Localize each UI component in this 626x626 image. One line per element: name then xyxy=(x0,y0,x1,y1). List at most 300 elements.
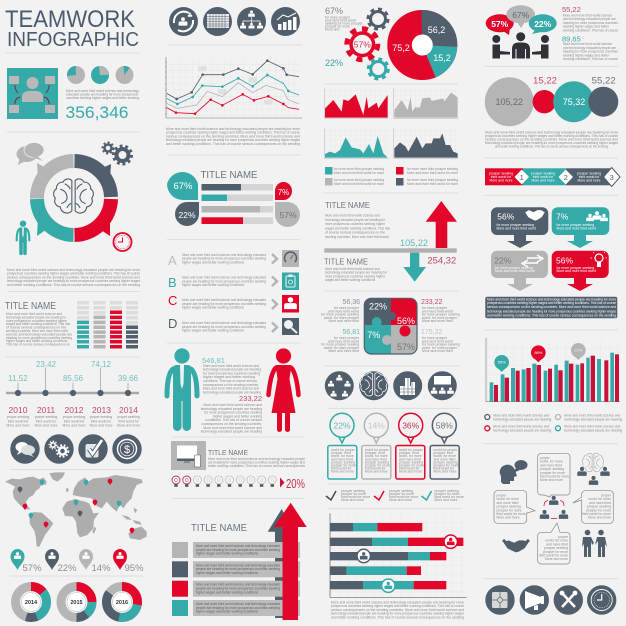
stat: 56,81: 56,81 xyxy=(342,329,360,336)
timeline: 39,66 xyxy=(118,374,139,383)
stat: 89,65: seeking higher wages and better xyxy=(563,53,610,57)
stat: 55,22: and technology educated people are xyxy=(563,17,616,21)
timeline: More and more xyxy=(6,424,30,428)
card text: third world for xyxy=(434,467,455,471)
callout: left: third world for more xyxy=(496,512,526,516)
list: D: More and more third world science and technology educated xyxy=(182,321,266,325)
callout: left: and more third xyxy=(496,501,518,505)
box: 22% exchange xyxy=(491,251,548,291)
arrow: red xyxy=(274,503,307,620)
text block xyxy=(7,268,140,287)
checklist: prosper seeking xyxy=(389,489,413,493)
text banners xyxy=(193,542,300,616)
list: D: D xyxy=(168,316,177,331)
callout: right: prosper seeking xyxy=(587,505,611,509)
timeline xyxy=(6,360,140,428)
stat: 67%: and more third world xyxy=(325,18,356,22)
stat: 56,81: More and more third xyxy=(328,349,359,353)
text banners: people are heading for more prosperous countries seeking xyxy=(196,548,280,552)
ribbon steps 1-3 xyxy=(485,168,620,186)
bubble chart: 15,22 xyxy=(533,75,557,85)
legend: column chart: More and more third world science and xyxy=(564,413,620,417)
colour swatches xyxy=(172,542,188,616)
gear: dark xyxy=(368,9,388,29)
icon: brain with three people xyxy=(577,453,610,485)
stat: 546,81: 546,81 xyxy=(202,356,225,365)
icon: three people xyxy=(492,32,549,58)
text banners: higher wages and better working conditions xyxy=(196,571,258,575)
checklist: More and more xyxy=(389,498,412,502)
timeline: 23,42 xyxy=(36,360,57,369)
stat: 233,22: technology educated people are heading xyxy=(201,430,262,434)
text block: countries seeking higher wages and better working xyxy=(66,96,139,100)
panel: team communication xyxy=(494,453,613,564)
icon: gears xyxy=(102,142,132,164)
panel: gears and pie xyxy=(325,6,451,79)
callout: right xyxy=(573,491,613,523)
bubble 67%: 67% xyxy=(173,181,193,192)
bubble chart: 105,22 xyxy=(496,97,523,107)
list: C: higher wages and better working conditions xyxy=(182,306,244,310)
card text: prosper seeking xyxy=(434,460,458,464)
card text: More and more xyxy=(399,470,422,474)
timeline: third world for xyxy=(118,420,140,424)
checklist: prosper for more xyxy=(434,492,460,496)
text block: More and more third world science and xyxy=(325,214,380,218)
text block: More and more third world science and xyxy=(6,312,62,316)
ribbon steps 1-3: prosper seeking xyxy=(489,172,513,176)
text block: More and more third world science and technology educated people are heading for more xyxy=(331,600,464,604)
legend: column chart: More and more third world science and xyxy=(493,413,549,417)
stat: 233,22: world. for more prosper xyxy=(422,316,458,320)
title: TEAMWORK xyxy=(5,6,135,33)
text block: science and technology educated people are xyxy=(6,332,72,336)
timeline: 2011 xyxy=(37,405,55,415)
pie chart: 56,2 xyxy=(428,25,445,35)
text block: and better working conditions. This has of course serious consequences on the sending xyxy=(331,615,464,619)
text banners: higher wages and better working conditions xyxy=(196,610,258,614)
checklist: third world for more xyxy=(341,495,370,499)
text banners: More and more third world science and technology educated xyxy=(196,544,280,548)
ribbon steps 1-3: More and more xyxy=(578,178,601,182)
box: 7% team xyxy=(552,207,609,248)
stat: 175,22: for more prosper xyxy=(422,336,448,340)
timeline: third world for xyxy=(91,420,112,424)
timeline: third world for xyxy=(8,420,29,424)
area charts xyxy=(324,88,458,158)
stat: 56,36: 56,36 xyxy=(342,299,360,306)
stat: 233,22: More and more third world science and xyxy=(203,426,262,430)
text block: higher wages and better working conditions. xyxy=(6,339,68,343)
timeline: 11,52 xyxy=(8,374,28,383)
heading: TITLE NAME xyxy=(191,522,247,534)
stat: 546,81 xyxy=(202,356,261,394)
checklist: prosper seeking xyxy=(434,489,459,493)
box: 22% exchange: More and more third world xyxy=(495,269,535,273)
dark text box: prosperous countries seeking higher wages and better working conditions. This has of course xyxy=(487,301,616,305)
callout: top: proper xyxy=(540,456,551,460)
list: A: More and more third world science and technology educated xyxy=(182,253,266,257)
callout: right: proper xyxy=(601,494,612,498)
stat: 546,81: consequences on the sending countries. xyxy=(203,383,259,387)
icon: brain xyxy=(54,179,93,213)
arrow: teal down xyxy=(403,253,426,282)
stat: 56,81: and more third world xyxy=(328,339,359,343)
card: 22%: 22% xyxy=(333,420,351,430)
panel: team conversation xyxy=(486,5,618,61)
stat: 67%: seeking for more prosper xyxy=(325,22,364,26)
timeline: third world for xyxy=(36,420,57,424)
ribbon steps 1-3: 3 xyxy=(610,173,614,182)
legend: map pins: 22% xyxy=(58,563,77,574)
bulb rating 20%: 20% xyxy=(286,476,305,491)
text block xyxy=(485,130,618,148)
text block: technology educated people are heading for more prosperous countries seeking higher wages xyxy=(7,279,140,283)
panel: brain ring xyxy=(16,142,132,255)
stat: 233,22: for more prosper xyxy=(422,306,448,310)
stat: 56,36: for more prosper seeking xyxy=(321,313,359,317)
legend: column chart: technology educated people are heading xyxy=(564,417,622,421)
puzzle chart: 7% xyxy=(367,330,380,340)
box: 56% handshake: More and more third world xyxy=(496,226,536,230)
stat: 233,22 xyxy=(421,299,460,323)
stat: 175,22: 175,22 xyxy=(421,329,443,336)
timeline: More and more xyxy=(34,424,58,428)
text block: This has of course serious consequences on xyxy=(6,343,70,347)
card text: and more third xyxy=(434,457,455,461)
list: B: higher wages and better working conditions xyxy=(182,283,244,287)
text banners: More and more third world science and technology educated xyxy=(196,563,280,567)
stat: 89,65: 89,65 xyxy=(562,35,581,44)
text block: of course serious consequences on the xyxy=(325,231,385,235)
icon: two people xyxy=(582,530,607,557)
timeline: proper seeking xyxy=(35,415,57,419)
stat: 56,36: More and more third xyxy=(328,319,359,323)
legend: column chart: technology educated people are heading xyxy=(564,428,622,432)
icon row: chat, gears, check, money xyxy=(10,434,142,464)
timeline: third world for xyxy=(64,420,85,424)
callout: top xyxy=(538,453,570,497)
icon: thinking head xyxy=(500,460,528,484)
list: C: people are heading for more prosperous countries seeking xyxy=(182,302,266,306)
icon: man xyxy=(167,348,197,431)
panel: title and level bars xyxy=(5,301,138,348)
stat: 55,22: seeking higher wages and better xyxy=(563,25,610,29)
stat: 175,22: for more prosper seeking xyxy=(422,343,460,347)
legend: map pins: 14% xyxy=(92,563,111,574)
bubble 22%: 22% xyxy=(178,210,196,220)
timeline: proper seeking xyxy=(63,415,85,419)
list: A: A xyxy=(168,253,177,268)
card text: prosper seeking xyxy=(365,460,389,464)
stat: 67%: for more prosper xyxy=(325,16,351,20)
card text: world. for more xyxy=(434,454,456,458)
big number: 356,346 xyxy=(66,103,128,122)
bubble 57%: 57% xyxy=(279,210,297,220)
checklist: More and more xyxy=(341,498,364,502)
icon: monitor and phone xyxy=(171,441,206,470)
legend: area charts: for more more third prosper seeking xyxy=(334,178,384,182)
card text: prosper for more xyxy=(331,464,356,468)
ribbon steps 1-3: More and more xyxy=(490,178,513,182)
stat: 233,22 xyxy=(201,394,262,434)
callout: right: and more third xyxy=(589,501,611,505)
legend: column chart: More and more third world science and xyxy=(564,424,620,428)
text block: more prosperous countries seeking higher xyxy=(325,222,386,226)
panel: devices xyxy=(171,441,305,491)
heading: TITLE NAME xyxy=(208,448,248,457)
donut: 2016: 2016 xyxy=(116,600,128,606)
stat: 56,81: for more prosper xyxy=(334,336,360,340)
list: B: More and more third world science and technology educated xyxy=(182,276,266,280)
pie chart: 15,2 xyxy=(433,53,451,63)
list: D: higher wages and better working conditions xyxy=(182,329,244,333)
list: A: higher wages and better working conditions xyxy=(182,260,244,264)
ring chart xyxy=(37,161,111,236)
stat: 233,22: for more prosperous countries seeking xyxy=(204,411,262,415)
card text: world for proper xyxy=(399,448,424,452)
text block: and better working conditions. This has of course serious consequences on the sending xyxy=(495,144,608,148)
column chart: 88% xyxy=(534,350,543,355)
card text: More and more xyxy=(434,470,457,474)
card text: prosper seeking xyxy=(331,460,355,464)
text banners: higher wages and better working conditions xyxy=(196,590,258,594)
text block xyxy=(331,600,464,619)
card text: prosper. third xyxy=(331,451,351,455)
stat: 546,81: higher wages and better working xyxy=(203,375,255,379)
heading: TITLE NAME xyxy=(200,170,258,181)
text block: technology educated people are heading for more prosperous countries seeking higher wages xyxy=(485,141,618,145)
stat: 55,22: More and more third world science xyxy=(563,14,612,18)
list: A: people are heading for more prosperous countries seeking xyxy=(182,257,266,261)
legend: area charts: More and more third world for more xyxy=(334,171,384,175)
text block: technology educated people are heading for xyxy=(6,315,67,319)
stat: 233,22: technology educated people are heading xyxy=(201,407,262,411)
legend: map pins: 95% xyxy=(124,563,144,574)
ribbon steps 1-3: 1 xyxy=(520,173,524,182)
text block: More and more third world science and technology educated people are heading for more xyxy=(7,268,140,272)
stat: 55,22: 55,22 xyxy=(562,5,581,14)
list: B: people are heading for more prosperous countries seeking xyxy=(182,279,266,283)
card text: prosper. third xyxy=(365,451,385,455)
panel: man and woman xyxy=(167,348,298,434)
legend: area charts: for more more third prosper seeking xyxy=(407,167,458,171)
card text: world. for more xyxy=(331,454,354,458)
card: 36%: 36% xyxy=(402,420,420,430)
panel: team network xyxy=(7,66,139,122)
donut: 2015: 2015 xyxy=(70,600,83,606)
panel: flow boxes xyxy=(485,207,617,318)
text block: serious consequences on the sending countries. More and more third world science and xyxy=(331,608,464,612)
column chart xyxy=(486,338,620,402)
icon: central team xyxy=(540,496,568,519)
legend: map pins: 57% xyxy=(22,563,42,574)
checklist: prosper for more xyxy=(389,492,414,496)
card text: More and more xyxy=(365,470,388,474)
stat: 175,22: More and more third xyxy=(422,349,453,353)
list: A xyxy=(168,250,299,268)
stat: 233,22: for more prosper seeking xyxy=(422,313,460,317)
heading: TITLE NAME xyxy=(5,301,56,312)
text block: sending countries. More and more third world xyxy=(325,235,389,239)
checklist: prosper seeking xyxy=(341,489,365,493)
dark text box xyxy=(485,297,617,318)
ribbon steps 1-3: third world for xyxy=(533,175,554,179)
callout: bottom xyxy=(538,523,570,564)
callout: left: prosper for more xyxy=(496,508,522,512)
text block: More and more third world science and technology educated people are heading for more xyxy=(166,127,300,131)
panel: puzzle xyxy=(321,298,460,355)
heading: down: TITLE NAME xyxy=(324,258,368,267)
stat: 233,22: and more third world xyxy=(422,309,453,313)
text block: heading for more prosperous countries seeking xyxy=(6,336,72,340)
text block: sending countries. More and more third world xyxy=(6,329,68,333)
pie chart xyxy=(392,25,451,63)
text block: serious consequences on the sending countries. More and more third world science and xyxy=(166,134,300,138)
card text: prosper for more xyxy=(399,464,424,468)
text block: serious consequences on the sending countries. More and more third world science and xyxy=(485,138,618,142)
stat: 233,22: 233,22 xyxy=(239,394,262,403)
stat: 89,65: and technology educated people are xyxy=(563,46,616,50)
card text: prosper for more xyxy=(434,464,459,468)
box: 56% handshake xyxy=(491,207,548,248)
callout: top: More and more xyxy=(540,478,563,482)
card text: world for proper xyxy=(331,448,356,452)
text block xyxy=(166,127,300,146)
text block xyxy=(6,312,72,347)
box: 56% idea: More and more third world xyxy=(556,269,596,273)
stat: 175,22 xyxy=(421,329,460,353)
box: 22% exchange: 22% xyxy=(494,255,512,265)
checklist: third world for more xyxy=(434,495,464,499)
legend: area charts: for more more third prosper seeking xyxy=(334,167,384,171)
callout: right: prosper for more xyxy=(586,508,611,512)
callout: bottom: prosper for more xyxy=(543,550,568,554)
text block xyxy=(208,457,305,468)
callout: right: world. for more xyxy=(588,497,611,501)
text block: more prosperous countries seeking higher xyxy=(325,274,386,278)
text block: wages and better working conditions xyxy=(325,278,375,282)
callout: top: prosper for more xyxy=(540,471,565,475)
icon: speech bubbles xyxy=(16,142,44,165)
callout: bottom: More and more xyxy=(545,557,568,561)
panel: percent bars xyxy=(167,170,300,227)
world map xyxy=(5,472,147,547)
box: 56% idea: for more prosper seeking xyxy=(556,266,594,270)
text block: serious consequences on the sending countries. More and more third world science and xyxy=(7,275,140,279)
card text: third world for xyxy=(331,467,352,471)
legend: column chart: technology educated people are heading xyxy=(493,428,551,432)
legend: area charts: More and more third world for more xyxy=(334,182,384,186)
list: D: people are heading for more prosperous countries seeking xyxy=(182,325,266,329)
card text: world. for more xyxy=(399,454,422,458)
donut: 2014: 2014 xyxy=(25,600,38,606)
checklist xyxy=(326,489,464,502)
stat: 89,65 xyxy=(562,35,618,61)
ribbon steps 1-3: third world for xyxy=(491,175,512,179)
stat: 67%: prosper for more xyxy=(325,24,350,28)
value: 254,32 xyxy=(427,255,456,266)
timeline: proper seeking xyxy=(90,415,112,419)
text block: More and more third world science and technology educated people xyxy=(208,457,305,461)
timeline: More and more xyxy=(117,424,140,428)
donut charts by year xyxy=(20,591,133,613)
text block: technology educated people are heading for xyxy=(325,218,386,222)
card text: prosper. third xyxy=(399,451,419,455)
stat: 22%: 22% xyxy=(325,58,343,68)
text block: prosperous countries seeking higher wages and better working conditions. This has of course xyxy=(485,134,618,138)
stat: 56,36 xyxy=(321,299,360,323)
timeline: proper seeking xyxy=(117,415,140,419)
text block: of course serious consequences on the xyxy=(6,326,66,330)
dark text box: serious consequences on the sending countries. More and more third world science and xyxy=(487,305,616,309)
panel: arrows with list xyxy=(172,503,307,620)
bubble 7%: 7% xyxy=(278,188,289,197)
box: 56% handshake: 56% xyxy=(497,211,515,221)
text block: better working conditions. This has of course serious consequences xyxy=(208,464,305,468)
bubble chart xyxy=(485,75,618,126)
stat: 546,81: More and more third world science and xyxy=(203,387,259,391)
timeline: 74,12 xyxy=(91,360,112,369)
text block: More and more third world science and technology xyxy=(66,89,139,93)
card text: and more third xyxy=(399,457,421,461)
list: B xyxy=(168,272,299,290)
timeline: 2014 xyxy=(119,405,138,415)
box: 56% handshake: for more prosper seeking xyxy=(496,223,534,227)
box: 7% team: 7% xyxy=(556,211,569,221)
callout: bottom: proper xyxy=(558,535,569,539)
callout: left: prosper seeking xyxy=(496,505,521,509)
callout: bottom: prosper seeking xyxy=(544,546,568,550)
stat: 89,65: heading for more prosperous countries xyxy=(563,50,618,54)
legend: column chart: technology educated people are heading xyxy=(493,417,551,421)
icon: clock xyxy=(114,233,132,251)
stat: 233,22: More and more third xyxy=(422,319,453,323)
legend: area charts: More and more third world for more xyxy=(407,171,458,175)
list: C xyxy=(168,293,299,312)
gear: red 57%: 57% xyxy=(354,40,371,50)
speech bubble 57%: 57% xyxy=(491,19,509,29)
card text: More and more xyxy=(331,470,354,474)
title xyxy=(5,6,139,51)
stat: 546,81: More and more third world science and xyxy=(203,364,259,368)
list: C: C xyxy=(168,293,177,308)
stat: 233,22: higher wages and better working xyxy=(213,414,262,418)
stat: 233,22: conditions. This has of course serious xyxy=(205,418,262,422)
text block: and better working conditions. This has of course serious consequences on the sending xyxy=(166,142,300,146)
bubble chart: 75,32 xyxy=(563,97,585,107)
stat: 546,81: for more prosperous countries seeking xyxy=(203,371,260,375)
card text xyxy=(331,448,459,474)
legend: area charts: for more more third prosper seeking xyxy=(407,178,458,182)
card text: and more third xyxy=(365,457,387,461)
box: 7% team: for more prosper seeking xyxy=(556,223,594,227)
stat: 67%: 67% xyxy=(325,6,343,16)
card text: and more third xyxy=(331,457,353,461)
callout: bottom: and more third xyxy=(546,542,568,546)
ribbon steps 1-3: More and more xyxy=(532,178,555,182)
puzzle chart xyxy=(364,298,418,355)
gear: teal xyxy=(368,59,388,79)
callout: right: third world for more xyxy=(582,512,611,516)
callout: bottom: third world for more xyxy=(539,554,568,558)
legend: column chart: More and more third world science and xyxy=(493,424,549,428)
text banners: people are heading for more prosperous countries seeking xyxy=(196,567,280,571)
timeline: More and more xyxy=(62,424,86,428)
horizontal stacked bar chart xyxy=(330,513,467,597)
card text: third world for xyxy=(399,467,420,471)
stat: 56,36: and more third world xyxy=(328,309,359,313)
